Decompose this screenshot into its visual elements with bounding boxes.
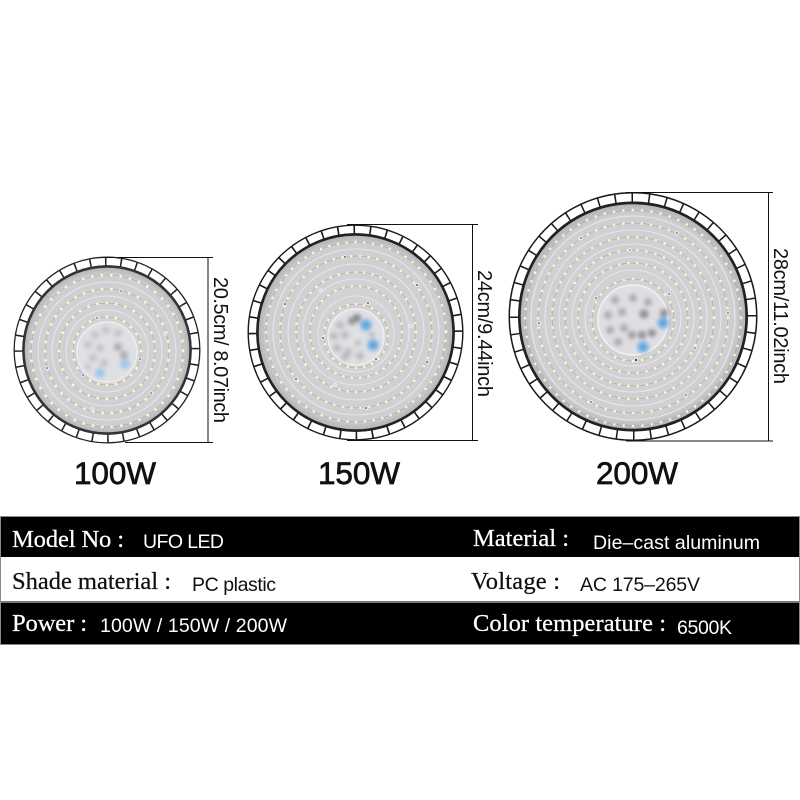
hub: 100W xyxy=(77,322,137,382)
lamp: 150W xyxy=(252,230,458,436)
hub: 150W xyxy=(328,309,384,365)
dimension: 100W diameter xyxy=(102,258,231,442)
lamp: 200W xyxy=(514,198,752,436)
dimension: 150W diameter xyxy=(347,224,495,440)
row 3: power and color temperature: Power : xyxy=(12,610,87,637)
row 3: power and color temperature: Color temperature : xyxy=(473,610,666,637)
row 3: power and color temperature xyxy=(12,610,732,639)
screws: 200W xyxy=(538,232,730,404)
label: 100W: 100W xyxy=(74,455,156,491)
screws: 100W xyxy=(46,290,167,411)
dimension: 200W diameter: 28cm/11.02inch xyxy=(769,248,791,384)
dimension: 200W diameter xyxy=(626,192,791,441)
row 3: power and color temperature: 100W / 150W / 200W xyxy=(100,615,288,637)
row 1: model and material xyxy=(12,525,760,554)
row 2: shade material and voltage: PC plastic xyxy=(192,574,276,596)
row 2: shade material and voltage: Shade material : xyxy=(12,568,171,595)
row 1: model and material: Model No : xyxy=(12,526,124,553)
dimension: 100W diameter: 20.5cm/ 8.07inch xyxy=(209,277,231,423)
row 3: power and color temperature: 6500K xyxy=(677,617,732,639)
label: 200W: 200W xyxy=(596,455,678,491)
dimension: 150W diameter: 24cm/9.44inch xyxy=(473,270,495,397)
row 2: shade material and voltage xyxy=(12,568,700,596)
row 2: shade material and voltage: AC 175–265V xyxy=(580,574,700,596)
row 2: shade material and voltage: Voltage : xyxy=(471,568,560,595)
row 1: model and material: Material : xyxy=(473,525,569,552)
specification table xyxy=(0,516,800,645)
row 1: model and material: UFO LED xyxy=(143,531,224,553)
lamp: 100W xyxy=(18,262,196,438)
screws: 150W xyxy=(284,256,428,410)
label: 150W: 150W xyxy=(318,455,400,491)
hub: 200W xyxy=(598,285,668,355)
row 1: model and material: Die–cast aluminum xyxy=(593,532,760,554)
